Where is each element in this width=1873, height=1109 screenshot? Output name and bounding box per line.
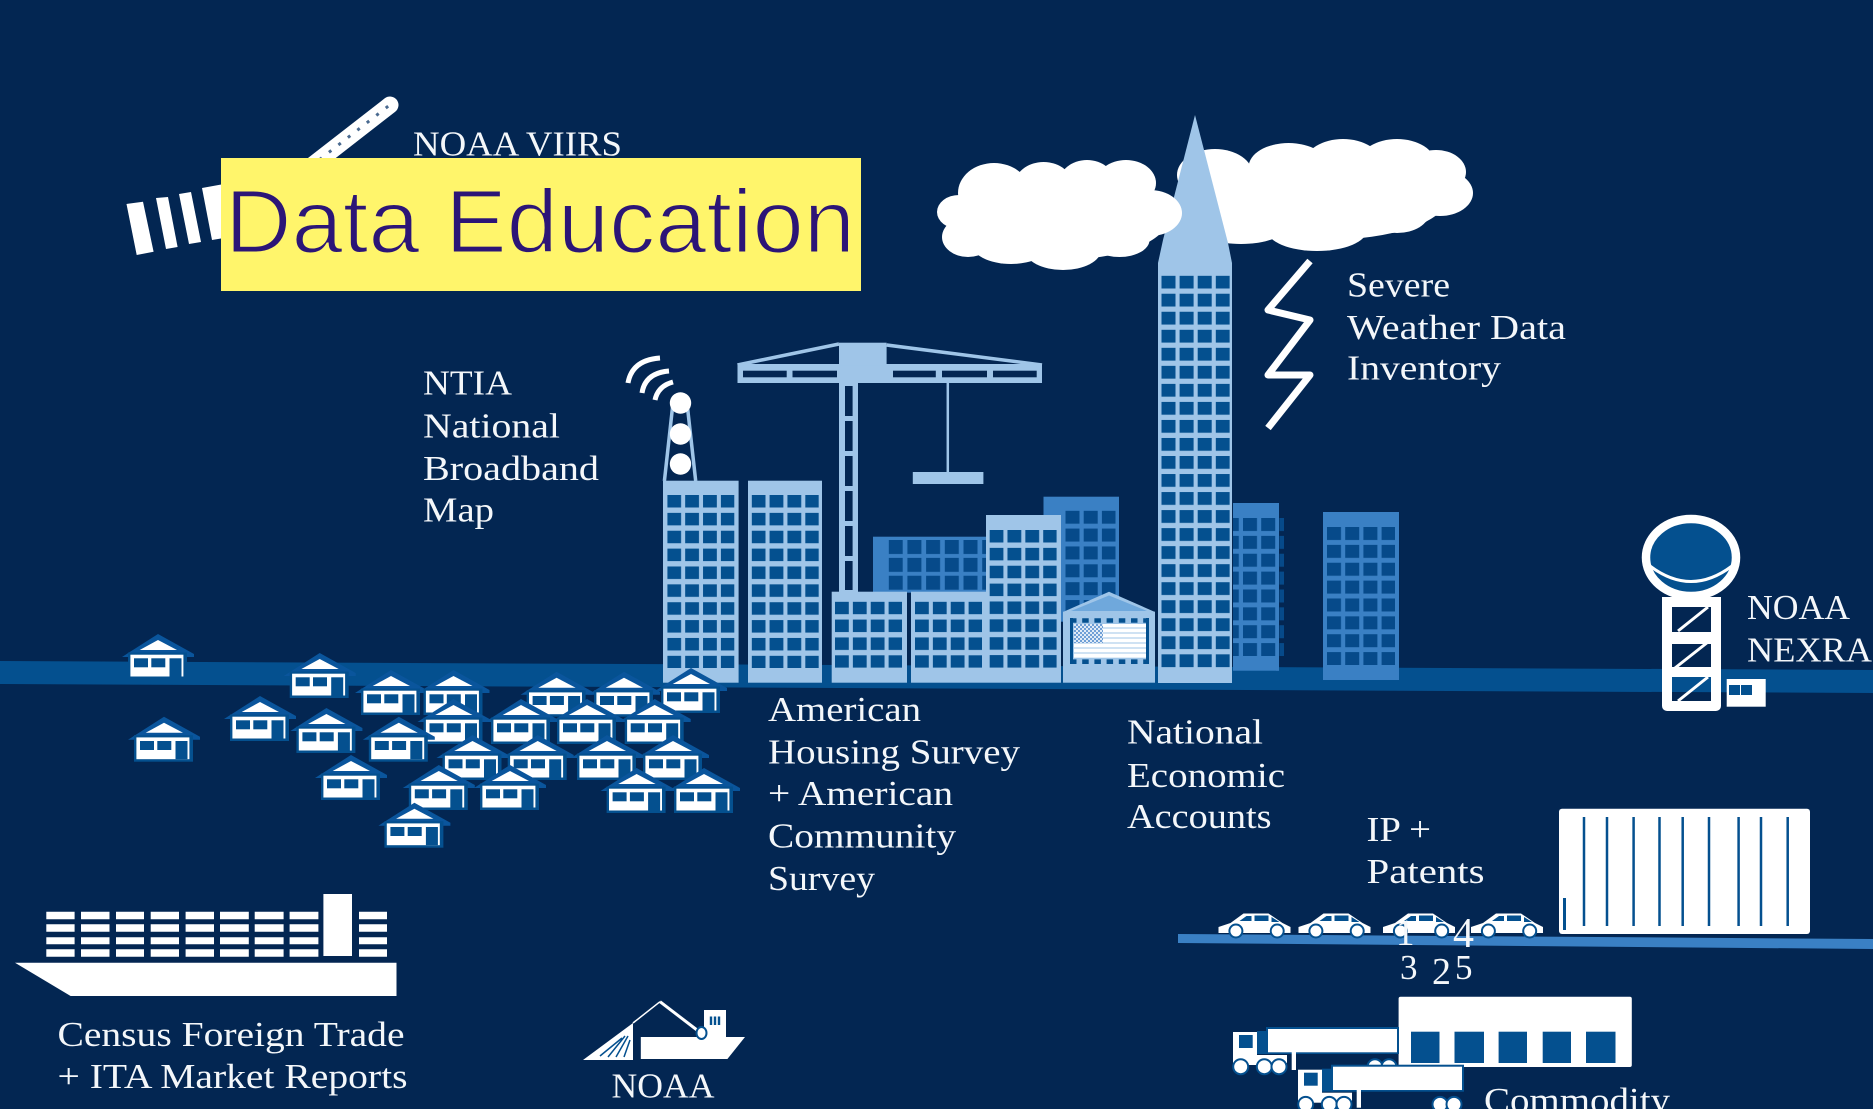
icon: row of cars xyxy=(1218,914,1543,938)
icon: satellite xyxy=(126,104,391,255)
icon: fishing boat with net xyxy=(583,1002,745,1060)
label: Severe Weather Data Inventory: Severe xyxy=(1347,266,1450,305)
overlapping footnote numbers: 5 xyxy=(1455,948,1472,987)
label: Census Foreign Trade + ITA Market Reports: Census Foreign Trade xyxy=(58,1015,404,1054)
building: central skyscraper with spire xyxy=(1158,115,1232,683)
neighbourhood houses xyxy=(122,634,740,848)
icon: upper truck xyxy=(1233,1027,1399,1074)
main ground band xyxy=(0,661,1873,693)
label: NOAA: NOAA xyxy=(612,1067,715,1106)
mid-tone building behind courthouse xyxy=(1044,497,1119,622)
label: NTIA National Broadband Map: NTIA xyxy=(423,364,513,402)
label: Severe Weather Data Inventory: Weather Data xyxy=(1347,308,1567,347)
label: Severe Weather Data Inventory: Inventory xyxy=(1347,348,1502,388)
label: Severe Weather Data Inventory xyxy=(1347,266,1567,388)
building: low block right xyxy=(911,592,986,683)
mid-tone building far right xyxy=(1323,512,1399,680)
icon: lower truck xyxy=(1298,1065,1464,1109)
label: NTIA National Broadband Map: Broadband xyxy=(423,449,600,488)
label: American Housing Survey + American Community Survey: + American xyxy=(768,774,953,813)
icon: weather radar tower xyxy=(1646,519,1736,706)
label: American Housing Survey + American Community Survey: Housing Survey xyxy=(768,732,1021,772)
label: American Housing Survey + American Community Survey: American xyxy=(768,690,921,729)
building: courthouse with flag xyxy=(1063,592,1155,683)
road band for cars xyxy=(1178,934,1873,949)
building: medium block xyxy=(986,515,1061,683)
icon: broadband antenna xyxy=(628,358,696,481)
crane xyxy=(738,343,1042,595)
icon: container ship xyxy=(15,894,396,996)
mid-tone building right of tower xyxy=(1233,503,1284,671)
label: Census Foreign Trade + ITA Market Reports: + ITA Market Reports xyxy=(58,1057,408,1096)
label: American Housing Survey + American Community Survey xyxy=(768,690,1021,898)
right storm cloud xyxy=(1177,139,1473,251)
overlapping footnote numbers: 4 xyxy=(1453,911,1474,957)
label: NTIA National Broadband Map: Map xyxy=(423,490,494,530)
label: National Economic Accounts: Accounts xyxy=(1127,797,1272,836)
overlapping footnote numbers xyxy=(1396,911,1474,993)
title banner: Data Education xyxy=(225,173,855,273)
icon: warehouse xyxy=(1399,997,1632,1067)
label: NTIA National Broadband Map xyxy=(423,364,600,530)
label: American Housing Survey + American Community Survey: Survey xyxy=(768,859,876,898)
label: American Housing Survey + American Community Survey: Community xyxy=(768,816,957,856)
label: NTIA National Broadband Map: National xyxy=(423,406,560,446)
overlapping footnote numbers: 3 xyxy=(1400,948,1418,987)
label: Census Foreign Trade + ITA Market Reports xyxy=(58,1015,408,1096)
label: National Economic Accounts: Economic xyxy=(1127,756,1285,795)
building: second tall block xyxy=(748,481,822,683)
overlapping footnote numbers: 1 xyxy=(1396,913,1414,954)
label: IP + Patents: Patents xyxy=(1366,852,1484,891)
label: NOAA NEXRAD xyxy=(1747,588,1873,670)
label: NOAA VIIRS: NOAA VIIRS xyxy=(413,124,622,164)
icon: lightning bolt xyxy=(1268,261,1310,428)
label: National Economic Accounts: National xyxy=(1127,712,1263,752)
label: NOAA NEXRAD: NOAA xyxy=(1747,588,1851,627)
label: IP + Patents xyxy=(1366,810,1484,891)
left storm cloud xyxy=(937,160,1182,270)
mid-tone background building behind low blocks xyxy=(873,537,987,593)
overlapping footnote numbers: 2 xyxy=(1432,951,1451,993)
building: low block left xyxy=(832,592,907,683)
label: National Economic Accounts xyxy=(1127,712,1285,836)
label: NOAA NEXRAD: NEXRA xyxy=(1747,631,1873,670)
label: IP + Patents: IP + xyxy=(1366,810,1431,849)
small radar station building xyxy=(1727,679,1766,707)
building: antenna tower block xyxy=(663,481,739,683)
icon: shipping container xyxy=(1559,809,1810,934)
